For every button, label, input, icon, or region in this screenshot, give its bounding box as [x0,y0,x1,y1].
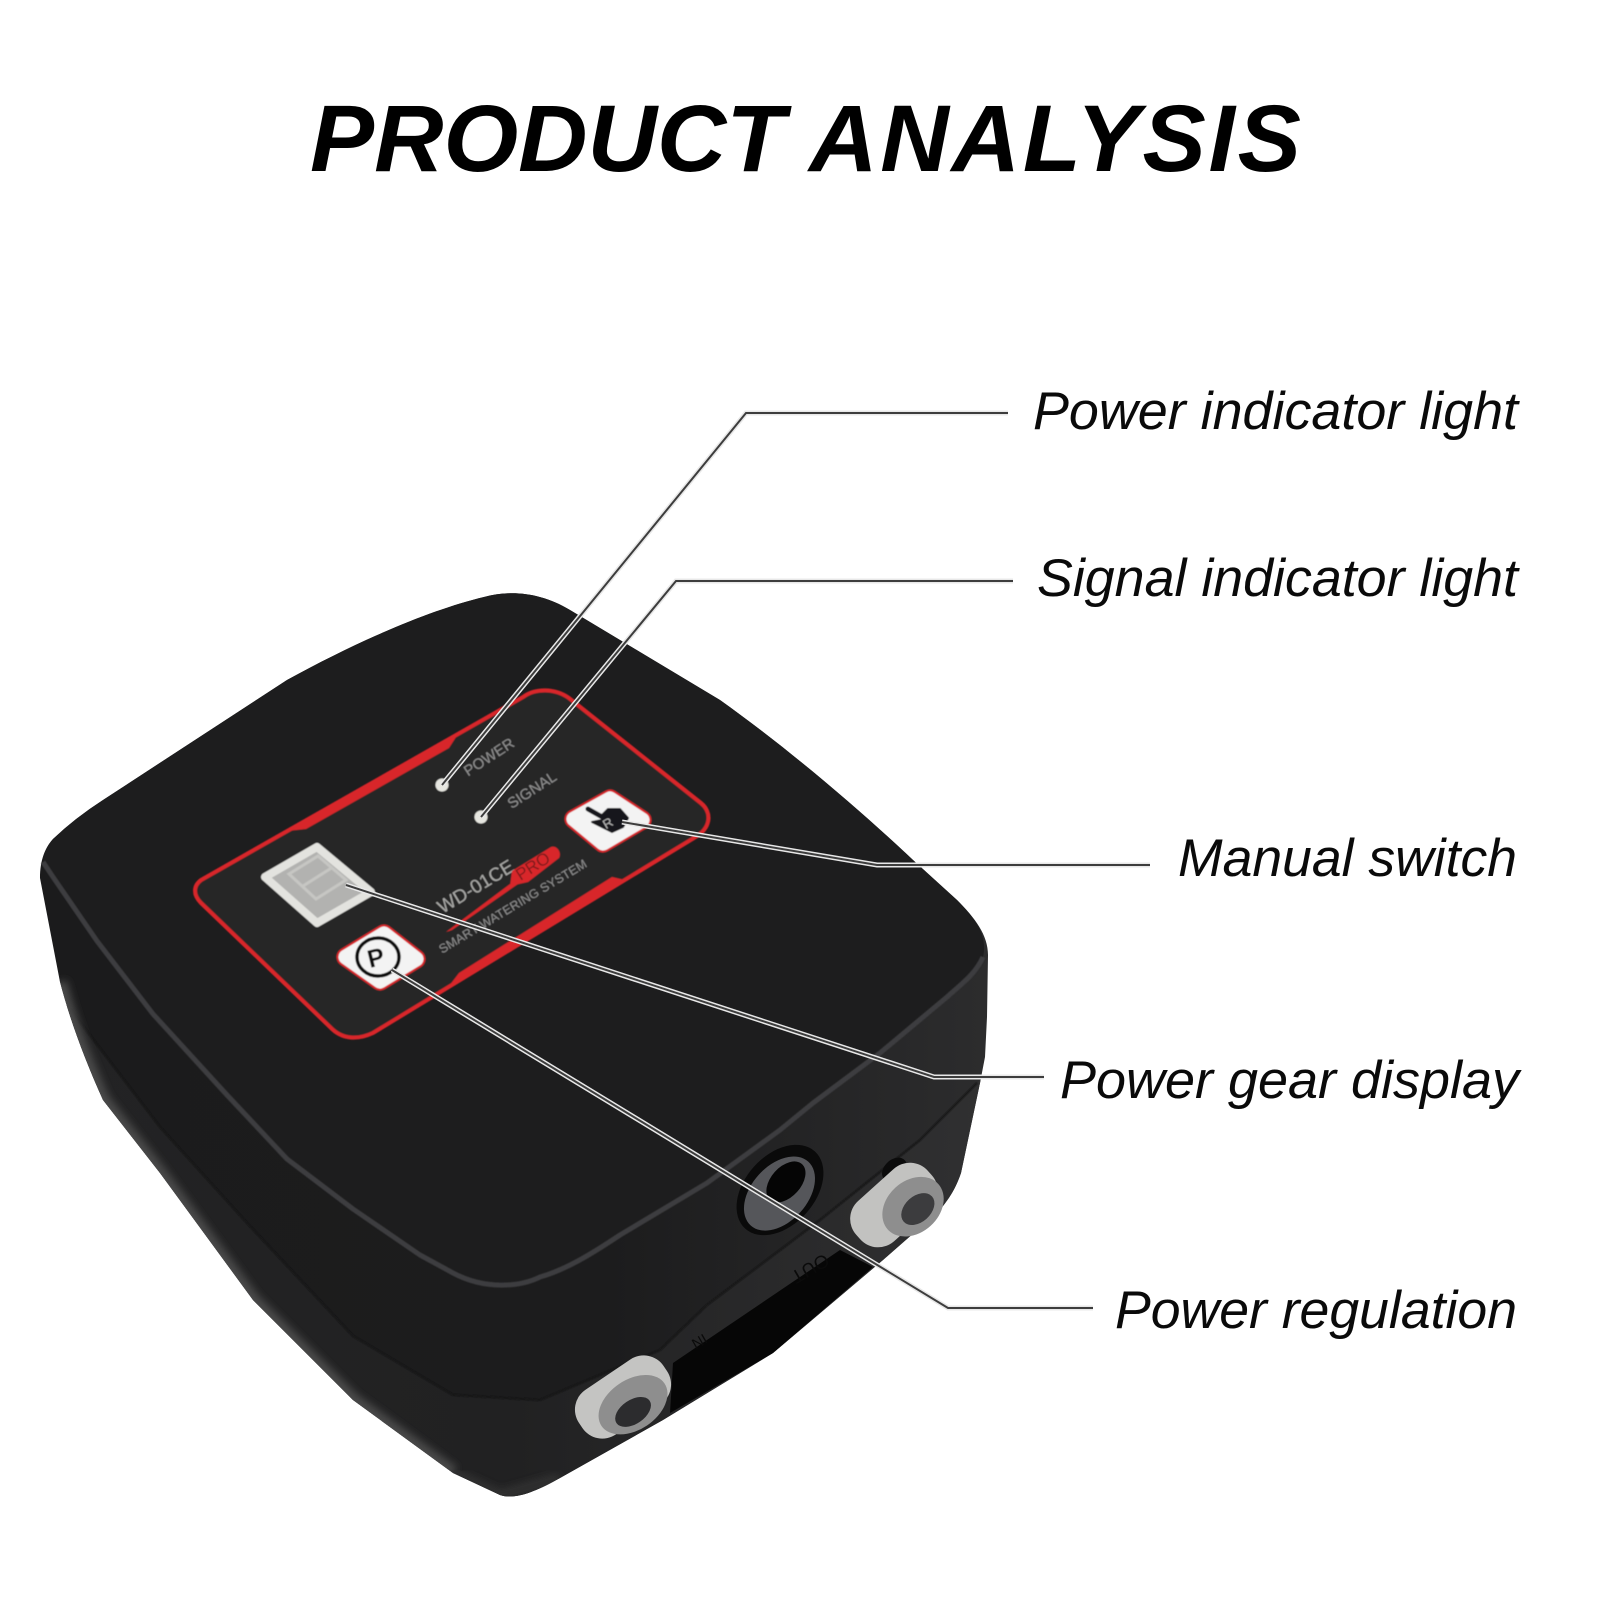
control panel [195,690,709,1038]
lid top surface [43,593,984,1285]
title: ANALYSIS [807,86,1301,192]
label: Power gear display: Power gear display [1060,1051,1523,1110]
button letter: R [600,814,616,832]
icon: pointing hand [588,809,628,832]
red underline [446,884,518,932]
product: smart watering device [40,593,990,1560]
port marking: OUT: OUT [787,1249,832,1287]
leader line: manual switch [622,822,1150,865]
seven-segment display [265,847,371,923]
tagline: SMART WATERING SYSTEM [436,857,589,956]
digit segments [289,856,346,899]
red accent stripe top [287,734,458,831]
signal LED [474,810,488,824]
label: Power regulation: Power regulation [1115,1281,1517,1340]
red accent stripe bottom [446,877,625,990]
leader line: power gear display [346,885,1044,1077]
model name: WD-01CE [434,856,518,918]
leader line: signal indicator light [481,581,1013,817]
label: SIGNAL: SIGNAL [505,768,560,813]
power LED [436,778,448,792]
lid rim highlight [43,862,983,1285]
title [310,86,1301,192]
left water connector [566,1346,686,1456]
port marking: IN: IN [689,1330,710,1352]
title: PRODUCT [310,86,792,192]
power regulation button [346,934,416,981]
panel face [195,690,709,1038]
label: Signal indicator light: Signal indicator light [1037,549,1520,608]
manual switch button [574,799,642,843]
device lower housing [60,978,981,1496]
power regulation button: P [365,943,388,974]
device body silhouette [40,593,988,1496]
label: Manual switch: Manual switch [1178,829,1517,888]
right water connector [834,1146,956,1267]
label: POWER: POWER [461,735,518,780]
black recess between ports [670,1250,873,1413]
leader line: power regulation [392,970,1093,1308]
PRO badge: PRO [512,848,554,884]
label: Power indicator light: Power indicator light [1033,382,1520,441]
leader line: power indicator light [442,413,1008,785]
icon: P in circle [357,938,399,976]
power jack [719,1128,841,1252]
